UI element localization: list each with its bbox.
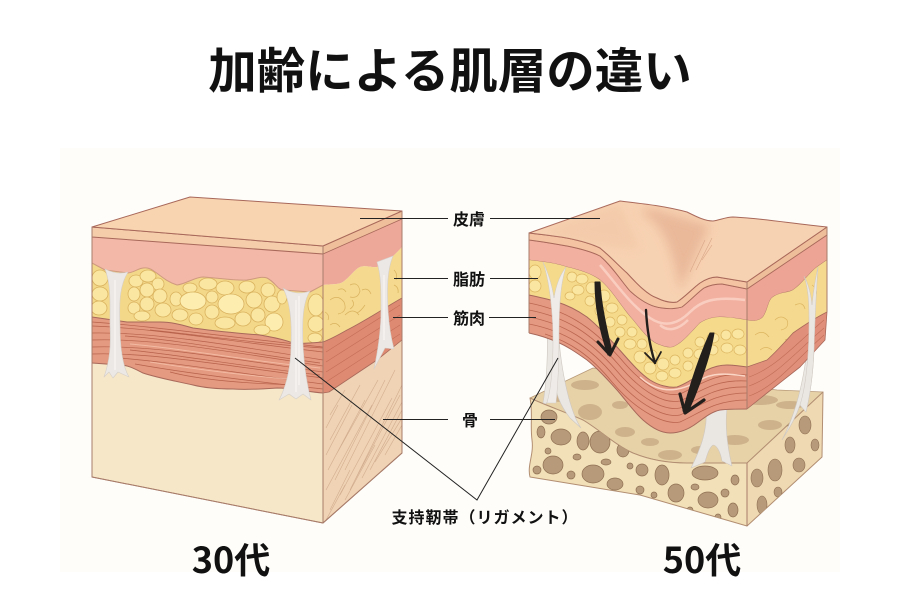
bone front face with pores xyxy=(529,398,747,526)
fat layer side xyxy=(324,248,402,342)
arrow: muscle sagging right xyxy=(680,333,714,413)
dermis front xyxy=(92,237,323,295)
label: skin: 皮膚 xyxy=(453,211,485,229)
label: age 50: 50代 xyxy=(663,532,741,584)
background panel xyxy=(60,148,840,572)
cube edges xyxy=(92,211,402,523)
bone block front xyxy=(92,340,323,523)
right ligament over side xyxy=(800,267,818,412)
thin epidermis front xyxy=(92,227,323,254)
fat layer front xyxy=(525,255,750,390)
dermis highlights xyxy=(600,265,745,329)
bone block side xyxy=(323,330,402,523)
muscle layer front xyxy=(530,296,746,432)
arrow: fat sagging centre xyxy=(645,310,661,363)
bone top face xyxy=(530,368,823,463)
muscle layer side xyxy=(747,312,827,409)
muscle layer side xyxy=(323,298,402,393)
label: age 30: 30代 xyxy=(192,532,270,584)
leader lines xyxy=(295,218,600,500)
dermis side xyxy=(323,219,402,285)
layer outlines front xyxy=(92,263,323,393)
fat layer side xyxy=(748,260,826,366)
label: fat: 脂肪 xyxy=(453,271,485,289)
layer outlines front xyxy=(529,260,747,433)
thin epidermis side xyxy=(747,227,827,289)
illustration: skin cross-section at age 30 xyxy=(90,197,405,523)
block edges xyxy=(529,227,827,526)
top face xyxy=(92,197,402,246)
arrow: fat sagging left xyxy=(595,282,618,355)
fat layer front xyxy=(92,264,322,343)
thin epidermis side xyxy=(323,211,402,254)
ligament over muscle xyxy=(543,262,566,403)
dermis front xyxy=(529,240,747,347)
thin epidermis front xyxy=(529,233,747,309)
ligaments xyxy=(538,260,818,468)
illustration: skin cross-section at age 50 xyxy=(525,201,830,526)
title: 加齢による肌層の違い xyxy=(208,45,692,99)
label: muscle: 筋肉 xyxy=(453,309,485,328)
ligaments xyxy=(104,256,394,400)
bone side face with pores xyxy=(747,392,823,526)
muscle layer front xyxy=(90,315,325,395)
top surface xyxy=(529,201,827,302)
label: retaining ligament: 支持靭帯（リガメント） xyxy=(391,508,579,527)
label: bone: 骨 xyxy=(462,412,478,430)
dermis side xyxy=(747,235,827,321)
